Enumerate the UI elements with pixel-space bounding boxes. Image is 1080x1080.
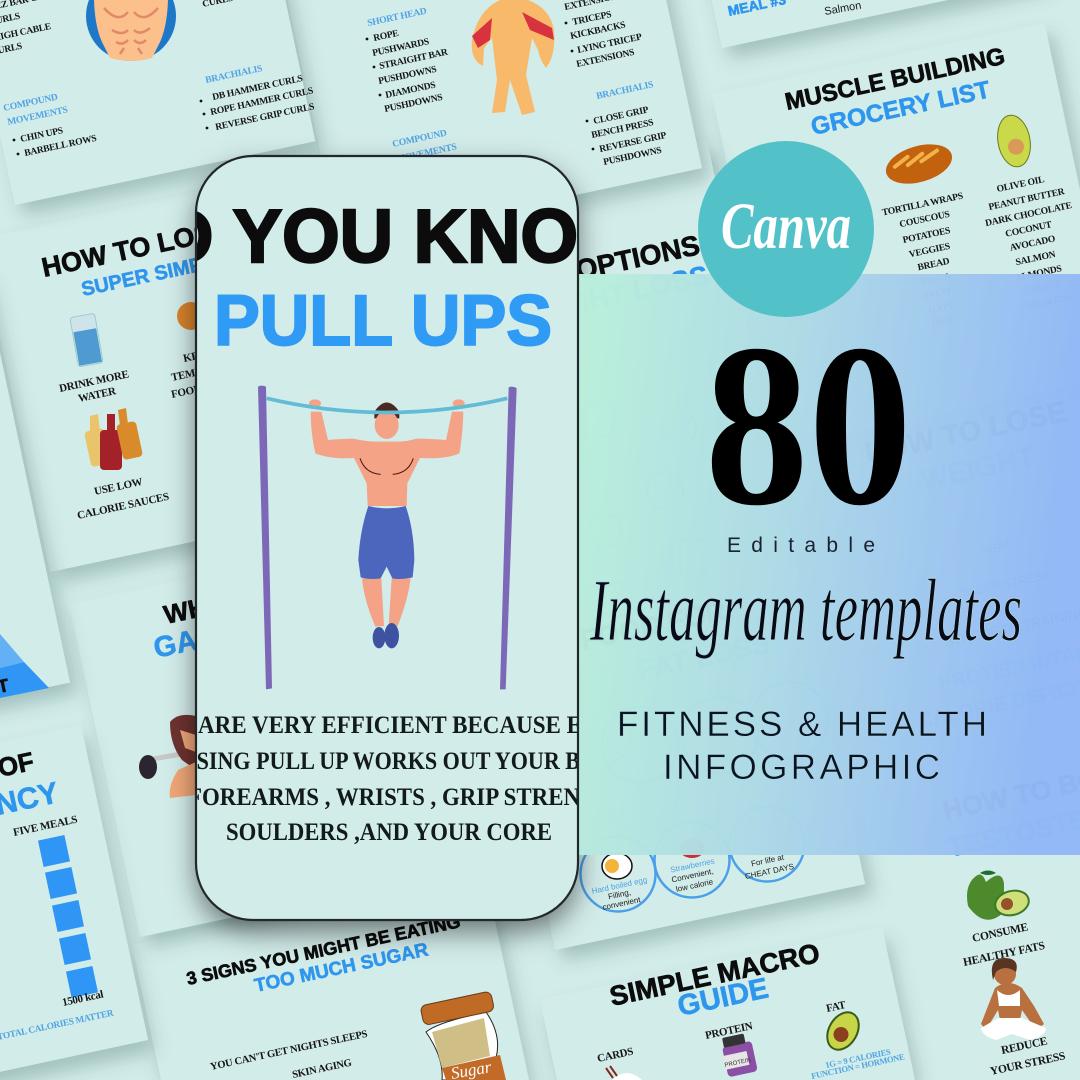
text: carbs list: FRUIT	[922, 285, 953, 302]
heading: options: OPTIONS	[573, 229, 703, 286]
text: fats list: ALMONDS	[1014, 263, 1063, 284]
card: pyramid	[0, 272, 70, 749]
circle: cheat days: For life at	[750, 853, 785, 868]
text: fats list: PEANUT BUTTER	[988, 186, 1067, 213]
label: compound movements	[391, 128, 458, 165]
logo: canva	[698, 141, 874, 317]
icon: yoga woman	[981, 958, 1046, 1040]
icon: water glass	[70, 313, 103, 367]
list: short head exercises: PUSHWARDS	[371, 36, 430, 59]
heading: pull ups: PULL UPS	[214, 282, 552, 361]
label: cards: CARDS	[596, 1046, 634, 1065]
icon: protein jar: PROTEIN	[724, 1058, 752, 1069]
label: five meals: FIVE MEALS	[12, 814, 79, 839]
subtitle: fitness and health: FITNESS & HEALTH	[617, 705, 987, 744]
card: what to eat to gain	[69, 525, 512, 937]
icon: sugar jar	[420, 991, 506, 1080]
heading: gain: GAIN	[151, 618, 228, 665]
phone frame	[196, 156, 578, 920]
card: meal plan	[653, 0, 1045, 48]
list: short head exercises: STRAIGHT BAR	[378, 46, 450, 72]
logo: canva: Canva	[721, 190, 851, 263]
label: compound movements: COMPOUND	[2, 92, 59, 114]
text: carbs list: TORTILLA WRAPS	[881, 191, 964, 218]
text: reduce your stress: REDUCE	[1000, 1035, 1049, 1057]
hands	[309, 399, 465, 406]
icon: bread	[881, 137, 957, 191]
ghost text: how to lose weight	[862, 396, 1080, 863]
card: bottom right how to boost testosterone	[962, 870, 1066, 1078]
heading: too much sugar: TOO MUCH SUGAR	[253, 939, 430, 997]
ghost text: how to lose weight: HOW TO LOSE	[862, 396, 1070, 470]
text: carbs list: BREAD	[917, 256, 951, 273]
phone shadow	[196, 156, 578, 920]
heading: muscle building: MUSCLE BUILDING	[783, 43, 1007, 116]
label: compound movements	[2, 92, 69, 128]
text: reduce your stress: YOUR STRESS	[989, 1050, 1066, 1078]
list: triceps exercises: KICKBACKS	[569, 20, 626, 42]
ghost text: how to lose weight: WEIGHT	[918, 441, 1038, 497]
circle: strawberries	[654, 822, 730, 898]
circle: hard boiled egg: Filling,	[607, 888, 632, 901]
ghost text: how to lose weight: SLEEP/STRESS	[961, 568, 1052, 600]
label: brachialis: BRACHIALIS	[204, 63, 263, 86]
circle: hard boiled egg	[580, 836, 656, 912]
list: compound exercises	[13, 125, 97, 159]
big number 80: 80	[705, 297, 912, 554]
body text: ISING PULL UP WORKS OUT YOUR B	[188, 748, 580, 775]
card: muscle building grocery list	[712, 23, 1080, 863]
panel: gradient promo	[570, 274, 1080, 855]
circle: hard boiled egg: convenient	[602, 895, 642, 912]
text: signs: YOU CAN'T GET NIGHTS SLEEPS	[209, 1029, 369, 1073]
text: fats list: SALMON	[1015, 249, 1057, 268]
heading: guide: GUIDE	[675, 972, 771, 1023]
list: triceps exercises: TRICEPS	[571, 9, 612, 28]
text: keep tempting food: FOOD	[170, 383, 203, 401]
label: compound movements: COMPOUND	[391, 128, 448, 150]
text: use low calorie sauces: CALORIE SAUCES	[76, 491, 170, 522]
label: brachialis: BRACHIALIS	[595, 79, 654, 102]
card: back and biceps top left	[0, 0, 315, 205]
list: brachialis exercises: DB HAMMER CURLS	[211, 73, 304, 103]
text: drink more water: DRINK MORE	[58, 369, 130, 395]
text: use low calorie sauces: USE LOW	[93, 476, 144, 498]
list: short head exercises: DIAMONDS	[384, 80, 436, 101]
text: consume healthy fats: CONSUME	[971, 921, 1030, 945]
list: short head exercises: ROPE	[372, 28, 400, 44]
text: carbs list: PASTA	[921, 271, 952, 288]
card: frequency	[0, 725, 148, 1080]
circle: hard boiled egg: Hard boiled egg	[591, 875, 648, 896]
phone content	[197, 192, 577, 919]
text: fats list: CHIA SEEDS	[1020, 292, 1072, 312]
text: fats list: CHEESE	[1023, 278, 1062, 297]
phone mockup	[194, 154, 580, 922]
list: compound exercises: BARBELL ROWS	[23, 133, 97, 159]
text: consume healthy fats: HEALTHY FATS	[962, 940, 1046, 969]
body text: SOULDERS ,AND YOUR CORE	[226, 819, 552, 846]
label: fat: FAT	[825, 999, 848, 1015]
list: biceps exercises	[0, 0, 62, 58]
text: keep tempting food: KEEP	[182, 347, 213, 365]
heading: what: WHAT	[161, 585, 242, 630]
icon: rice bowl	[606, 1066, 642, 1080]
circle: strawberries: Convenient,	[671, 867, 714, 884]
heading: simple macro: SIMPLE MACRO	[607, 937, 822, 1012]
icon: cookie	[177, 302, 205, 330]
shorts	[358, 506, 414, 579]
card: three signs of too much sugar	[132, 870, 529, 1080]
list: brachialis exercises: ROPE HAMMER CURLS	[209, 85, 314, 118]
text: carbs list: RICE	[931, 314, 956, 329]
text: fats list: DARK CHOCOLATE	[984, 200, 1073, 229]
man body	[311, 412, 463, 506]
text: carbs list: COUSCOUS	[898, 209, 951, 230]
illustration: man doing pull ups	[258, 386, 517, 689]
text: fats list: COCONUT	[1004, 219, 1053, 240]
text: fat notes: 1G = 9 CALORIES	[824, 1046, 892, 1070]
circle: cheat days: CHEAT DAYS	[744, 862, 795, 881]
body text: FOREARMS , WRISTS , GRIP STREN	[188, 784, 580, 811]
text: total calories matter: TOTAL CALORIES MATTER	[0, 1008, 115, 1043]
text: fats list: OLIVE OIL	[996, 174, 1045, 195]
card: simple macro guide	[540, 927, 915, 1080]
heading: how to lose: HOW TO LOSE	[39, 214, 233, 283]
icon: back muscle figure	[472, 0, 554, 115]
label: compound movements: MOVEMENTS	[6, 104, 69, 128]
circle: strawberries: low calorie	[675, 877, 714, 894]
list: brachialis exercises: BENCH PRESS	[590, 117, 654, 141]
icon: avocado	[821, 1007, 865, 1055]
card: arm muscles top middle	[253, 0, 702, 245]
card: options for weight loss	[397, 141, 865, 950]
list: triceps exercises: LYING TRICEP	[576, 31, 643, 56]
list: brachialis exercises: REVERSE GRIP	[598, 130, 668, 155]
circle: strawberries: Strawberries	[670, 856, 715, 875]
ghost heading: food for fat loss	[578, 595, 773, 686]
body text	[188, 712, 582, 846]
card: how to lose super simple	[0, 173, 363, 572]
text: carbs list: OATS	[927, 301, 953, 316]
bar: five meal squares	[38, 835, 98, 998]
list: triceps exercises: EXTENSIONS	[575, 47, 635, 70]
heading: did you know: DID YOU KNOW	[86, 194, 648, 278]
text: fats list	[984, 174, 1073, 312]
text: use low calorie sauces	[76, 476, 170, 522]
text: drink more water: WATER	[77, 385, 118, 405]
text: keep tempting food: TEMPTING	[170, 360, 230, 384]
text: salmon: Salmon	[823, 0, 862, 18]
list: brachialis exercises	[586, 104, 668, 168]
text: carbs list	[881, 191, 964, 329]
subtitle: infographic: INFOGRAPHIC	[663, 748, 940, 787]
heading: weight loss: WEIGHT LOSS	[513, 260, 711, 331]
ghost: food circles row	[602, 682, 828, 828]
label: 1500 kcal: 1500 kcal	[61, 988, 105, 1009]
icon: protein jar	[722, 1033, 758, 1077]
chart: pyramid	[0, 634, 49, 698]
text: carbs list: POTATOES	[902, 225, 951, 246]
icon: avocados	[967, 870, 1031, 920]
ghost heading: food for fat loss: FOOD FOR	[578, 595, 729, 656]
list: short head exercises: PUSHDOWNS	[383, 92, 443, 115]
label: compound movements: MOVEMENTS	[395, 141, 458, 165]
label: protein: PROTEIN	[704, 1020, 754, 1042]
icon: woman with barbell	[139, 715, 196, 798]
ghost heading: food for fat loss: FAT LOSS	[635, 628, 773, 686]
list: short head exercises: PUSHDOWNS	[377, 64, 437, 87]
legs	[362, 578, 411, 627]
list: brachialis exercises: PUSHDOWNS	[602, 145, 662, 168]
list: brachialis exercises	[200, 73, 315, 133]
list: short head exercises	[366, 28, 450, 115]
shoes	[373, 623, 399, 648]
list: brachialis exercises: REVERSE GRIP CURLS	[214, 101, 315, 133]
heading: super simple: SUPER SIMPLE	[79, 248, 230, 301]
body text: ARE VERY EFFICIENT BECAUSE E	[198, 712, 582, 739]
text: editable: Editable	[727, 534, 875, 557]
text: reduce your stress	[989, 1035, 1066, 1078]
icon: sauce bottles	[84, 408, 143, 470]
ghost text: how to lose weight: NEAT	[980, 538, 1014, 558]
text: fats list: AVOCADO	[1009, 233, 1056, 254]
chest lines	[360, 458, 413, 474]
text: consume healthy fats	[962, 921, 1046, 969]
icon: torso	[86, 0, 176, 61]
text: carbs list: VEGGIES	[908, 241, 951, 260]
list: brachialis exercises: CLOSE GRIP	[592, 104, 650, 127]
list: compound exercises: CHIN UPS	[19, 125, 64, 145]
label: short head: SHORT HEAD	[366, 6, 428, 29]
text: keep tempting food	[170, 347, 230, 401]
chin up bar	[267, 398, 507, 412]
uprights	[258, 386, 272, 689]
circle: cheat days	[730, 806, 804, 882]
heading: grocery list: GROCERY LIST	[809, 77, 993, 141]
icon: avocado	[994, 113, 1034, 169]
heading: three signs: 3 SIGNS YOU MIGHT BE EATING	[185, 911, 462, 989]
ghost: food icons	[579, 402, 706, 617]
list: triceps exercises	[563, 0, 643, 70]
man head	[374, 402, 399, 439]
